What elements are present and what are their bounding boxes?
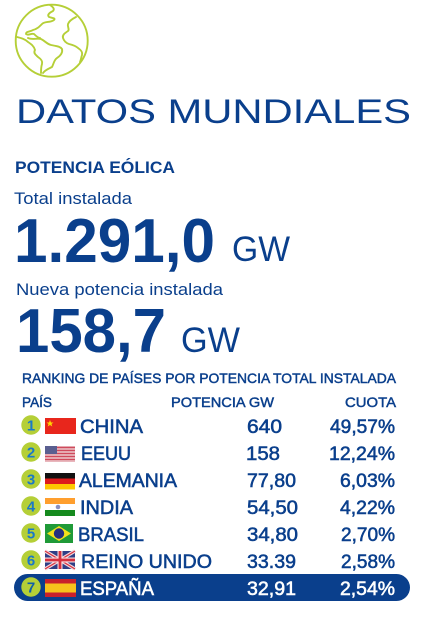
row: Brasil: 34,80 bbox=[247, 525, 298, 546]
row: China: 49,57% bbox=[330, 417, 395, 438]
label: nueva potencia instalada: Nueva potencia instalada bbox=[16, 280, 224, 299]
ranking heading: RANKING DE PAÍSES POR POTENCIA TOTAL INSTALADA bbox=[22, 370, 397, 386]
stat: new installed: GW bbox=[181, 321, 240, 360]
row: China: CHINA bbox=[80, 417, 143, 438]
row: India: 4,22% bbox=[340, 498, 395, 519]
table header: POTENCIA GW bbox=[171, 394, 275, 410]
stat: total installed: 1.291,0 bbox=[14, 207, 215, 276]
row: Reino Unido bbox=[21, 550, 395, 573]
table header: CUOTA bbox=[345, 394, 397, 410]
row: Reino Unido: 33.39 bbox=[247, 552, 296, 573]
row: Reino Unido: REINO UNIDO bbox=[81, 552, 212, 573]
row: India bbox=[21, 496, 395, 519]
row: EEUU: 158 bbox=[246, 444, 280, 465]
row: España (highlighted): 2,54% bbox=[340, 579, 395, 600]
table header: PAÍS bbox=[22, 394, 52, 410]
row: EEUU: 12,24% bbox=[329, 444, 395, 465]
row: Alemania: 3 bbox=[27, 471, 35, 488]
stat: total installed: GW bbox=[232, 230, 290, 269]
row: Reino Unido: 6 bbox=[27, 552, 35, 569]
row: EEUU: 2 bbox=[27, 444, 35, 461]
row: EEUU bbox=[21, 442, 395, 465]
row: India: 54,50 bbox=[247, 498, 298, 519]
row: EEUU: EEUU bbox=[81, 444, 131, 465]
row: Alemania: ALEMANIA bbox=[79, 471, 177, 492]
row: España (highlighted): ESPAÑA bbox=[80, 578, 154, 600]
row: India: 4 bbox=[27, 498, 36, 515]
row: Alemania: 77,80 bbox=[247, 471, 296, 492]
title: DATOS MUNDIALES bbox=[16, 93, 411, 131]
row: Alemania: 6,03% bbox=[340, 471, 395, 492]
row: Brasil: 5 bbox=[27, 525, 35, 542]
row: España (highlighted) bbox=[14, 574, 410, 601]
label: total instalada: Total instalada bbox=[14, 189, 133, 208]
table header bbox=[22, 394, 397, 410]
row: España (highlighted): 32,91 bbox=[247, 579, 296, 600]
stat: new installed: 158,7 bbox=[16, 297, 166, 366]
row: Reino Unido: 2,58% bbox=[341, 552, 395, 573]
row: China: 1 bbox=[27, 417, 35, 434]
row: Brasil: 2,70% bbox=[341, 525, 395, 546]
row: India: INDIA bbox=[80, 498, 133, 519]
icon: globe bbox=[16, 5, 88, 77]
row: Brasil bbox=[21, 523, 395, 546]
row: Alemania bbox=[21, 469, 395, 492]
row: España (highlighted): 7 bbox=[27, 579, 35, 596]
row: China: 640 bbox=[247, 417, 282, 438]
row: China bbox=[21, 415, 395, 438]
row: Brasil: BRASIL bbox=[78, 525, 144, 546]
stat: new installed bbox=[16, 297, 240, 366]
heading: potencia eólica: POTENCIA EÓLICA bbox=[15, 158, 175, 177]
